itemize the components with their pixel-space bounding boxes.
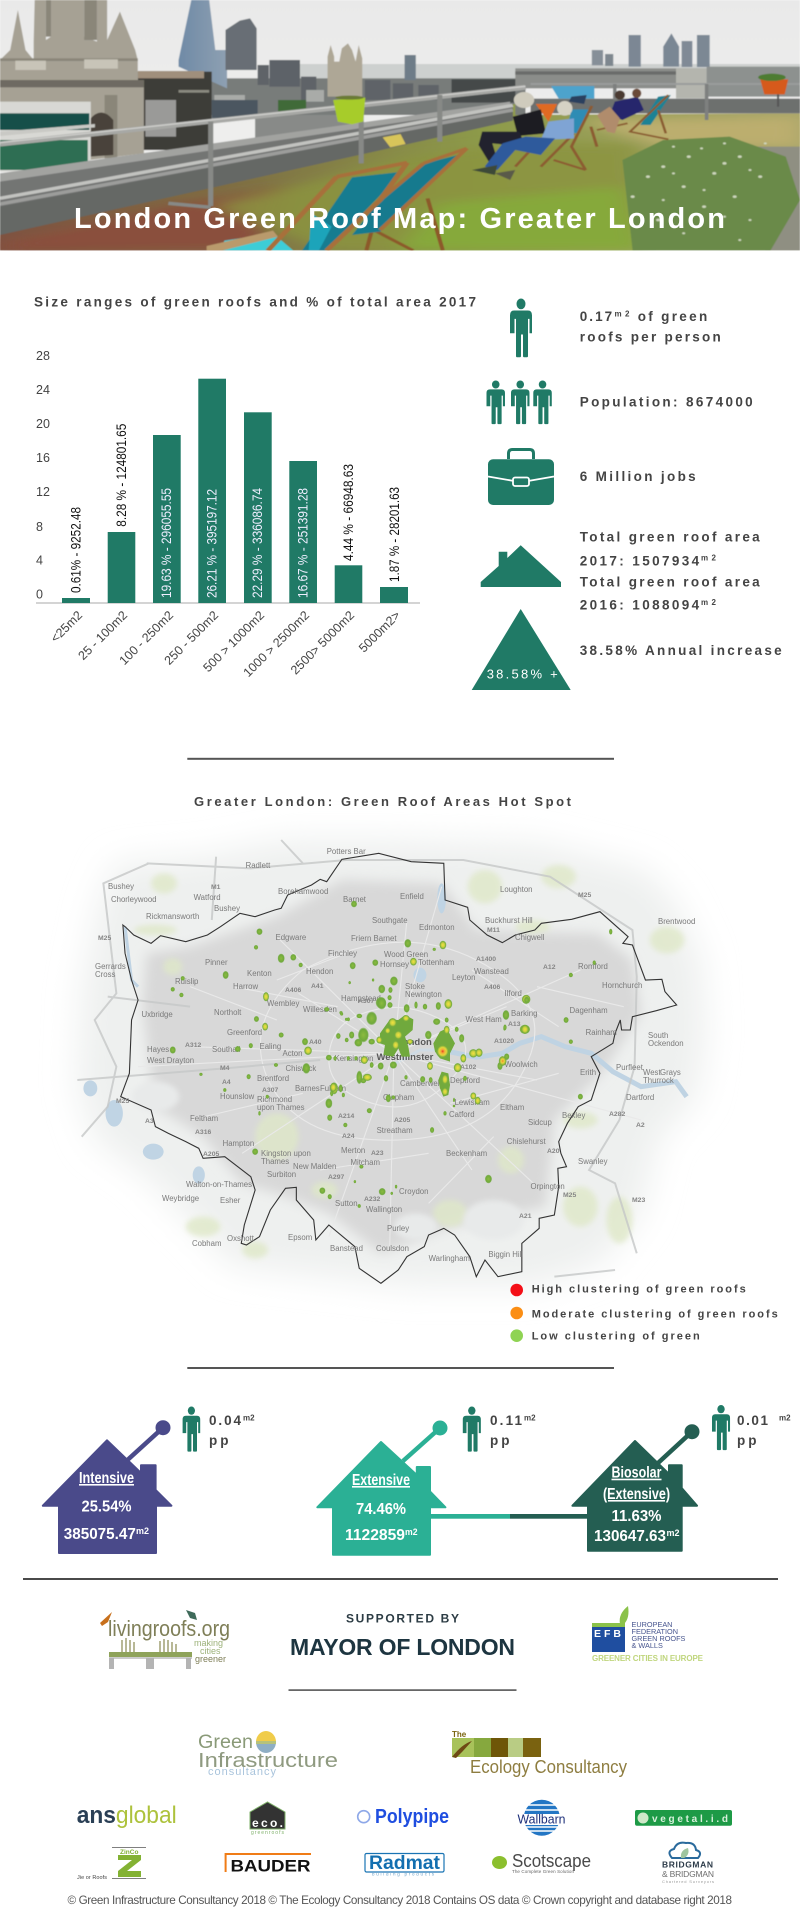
stat: per person: roofs per person — [580, 330, 721, 345]
logo: livingroofs.org: livingroofs.org — [108, 1616, 230, 1641]
map place labels: A307 — [358, 998, 374, 1005]
map place labels: Southall — [212, 1045, 240, 1054]
bar value labels: 16.67 % - 251391.28 — [296, 488, 310, 598]
logo: EFB: FEDERATION — [632, 1627, 678, 1636]
map place labels: Hornchurch — [602, 981, 642, 990]
map place labels: A307 — [262, 1087, 278, 1094]
map place labels: Wembley — [267, 999, 299, 1008]
map heading: Greater London: Green Roof Areas Hot Spot — [194, 794, 572, 809]
map place labels: A102 — [460, 1064, 476, 1071]
stats column — [472, 298, 782, 690]
map place labels: A2 — [636, 1122, 645, 1129]
map place labels: Rickmansworth — [146, 912, 199, 921]
y axis labels: 8 — [36, 520, 43, 534]
map place labels: Hampton — [223, 1139, 254, 1148]
stat: per person: 0.17 — [580, 309, 612, 324]
axis line — [36, 602, 420, 604]
map place labels: Swanley — [578, 1157, 608, 1166]
roof type: biosolar: Biosolar — [612, 1465, 662, 1482]
stat: total area: Total green roof area — [580, 530, 760, 545]
bar value labels: 22.29 % - 336086.74 — [250, 488, 265, 598]
map place labels: A214 — [338, 1113, 354, 1120]
y axis labels — [36, 349, 50, 602]
person stat: extensive — [463, 1406, 536, 1452]
map place labels: Bushey — [214, 904, 240, 913]
map place labels: Loughton — [500, 885, 533, 894]
map place labels: Brentford — [257, 1074, 289, 1083]
icon: house — [481, 545, 561, 587]
map place labels: Camberwell — [400, 1079, 441, 1088]
map place labels: West Drayton — [147, 1056, 194, 1065]
map place labels: M25 — [98, 935, 111, 942]
map place labels: Hampstead — [341, 994, 381, 1003]
map place labels: Chorleywood — [111, 895, 157, 904]
y axis labels: 28 — [36, 349, 50, 363]
logo: Wallbarn: Wallbarn — [518, 1812, 566, 1826]
roof type: intensive — [43, 1420, 171, 1553]
map place labels: Banstead — [330, 1244, 363, 1253]
map place labels: Uxbridge — [142, 1010, 173, 1019]
legend: High clustering of green roofs — [532, 1284, 746, 1296]
logo: EFB: & WALLS — [632, 1641, 663, 1650]
bars — [62, 379, 408, 603]
legend: Low clustering of green — [532, 1330, 700, 1342]
map place labels: Woolwich — [504, 1060, 538, 1069]
roof type: extensive: 1122859 — [345, 1527, 405, 1544]
map place labels: A406 — [484, 984, 500, 991]
category labels: 100 - 250m2 — [117, 608, 176, 668]
bar value labels: 4.44 % - 66948.63 — [341, 464, 356, 561]
hero photo: rooftop meadow and London skyline — [0, 0, 800, 253]
map place labels: Grays — [660, 1068, 681, 1077]
person stat: intensive: 0.04 — [209, 1413, 241, 1428]
map place labels: Chigwell — [515, 933, 545, 942]
map place labels: Barnet — [343, 895, 367, 904]
map place labels: Purfleet — [616, 1063, 644, 1072]
roof type: extensive — [317, 1420, 448, 1555]
map place labels: Willesden — [303, 1005, 337, 1014]
person stat: biosolar: m2 — [779, 1414, 791, 1422]
logo: Radmat: building products — [372, 1872, 435, 1876]
supported by Mayor of London: SUPPORTED BY — [346, 1612, 459, 1626]
map place labels: Erith — [580, 1068, 596, 1077]
roof type: biosolar: m2 — [666, 1528, 680, 1539]
map place labels: Eltham — [500, 1103, 524, 1112]
person stat: extensive: m2 — [524, 1414, 536, 1422]
category labels: 1000 > 2500m2 — [241, 608, 312, 680]
stat: per person: m2 — [614, 310, 630, 318]
map place labels: Lewisham — [455, 1098, 490, 1107]
connector bar — [431, 1514, 588, 1519]
map place labels: Harrow — [233, 982, 258, 991]
map place labels: Purley — [387, 1224, 409, 1233]
logo: eco greenroofs — [250, 1802, 285, 1836]
map place labels: Wallington — [366, 1205, 402, 1214]
logo: eco greenroofs: eco. — [252, 1816, 283, 1830]
map place labels: A1400 — [476, 956, 496, 963]
map place labels: Hendon — [306, 967, 333, 976]
map place labels: Clapham — [383, 1093, 414, 1102]
logo: EFB: GREENER CITIES IN EUROPE — [592, 1654, 704, 1663]
map place labels: Hornsey — [380, 960, 409, 969]
map place labels: Edgware — [276, 933, 306, 942]
map place labels: upon Thames — [257, 1103, 305, 1112]
logo: livingroofs.org — [100, 1610, 230, 1669]
logo: The Ecology Consultancy: Ecology Consultancy — [470, 1757, 627, 1777]
map place labels: Kensington — [334, 1054, 374, 1063]
map place labels: A40 — [309, 1039, 322, 1046]
roof type: extensive: m2 — [405, 1527, 418, 1538]
map place labels: Cobham — [192, 1239, 221, 1248]
logo: eco greenroofs: greenroofs — [251, 1830, 284, 1836]
logo: Scotscape — [492, 1851, 591, 1874]
logo: The Ecology Consultancy — [452, 1730, 627, 1777]
logo: Bridgman & Bridgman — [662, 1843, 714, 1884]
stat: per person — [580, 309, 721, 345]
logo: ZinCo: Jie or Roofs — [77, 1875, 107, 1881]
map place labels: M25 — [578, 892, 591, 899]
map place labels: South — [648, 1031, 668, 1040]
map place labels: Finchley — [328, 949, 357, 958]
map place labels: Chiswick — [286, 1064, 316, 1073]
map place labels: Bexley — [562, 1111, 586, 1120]
supported by Mayor of London: MAYOR OF LONDON — [290, 1634, 515, 1660]
map place labels: Sidcup — [528, 1118, 553, 1127]
bar value labels: 19.63 % - 296055.55 — [159, 488, 174, 598]
map place labels: Borehamwood — [278, 887, 328, 896]
map place labels: Tottenham — [418, 958, 454, 967]
category labels: 5000m2> — [356, 608, 403, 655]
map place labels: Enfield — [400, 892, 424, 901]
map place labels: Kenton — [247, 969, 272, 978]
bar value labels: 26.21 % - 395197.12 — [204, 489, 220, 598]
map place labels: Thurrock — [643, 1076, 674, 1085]
icon: three people — [486, 380, 552, 424]
y axis labels: 24 — [36, 383, 50, 397]
map place labels: A205 — [203, 1151, 219, 1158]
logo: EFB: GREEN ROOFS — [632, 1634, 686, 1643]
map place labels: Bushey — [108, 882, 134, 891]
logo: Bridgman & Bridgman: Chartered Surveyors — [662, 1879, 714, 1884]
stat: jobs: 6 Million jobs — [580, 469, 696, 484]
logo: EFB — [592, 1606, 704, 1663]
logo: BAUDER: BAUDER — [230, 1856, 310, 1876]
map place labels: A20 — [547, 1148, 560, 1155]
stat: population: Population: 8674000 — [580, 395, 753, 410]
supported by Mayor of London — [290, 1612, 515, 1660]
logo: vegetal i.d.: vegetal.i.d — [652, 1814, 728, 1825]
legend — [510, 1284, 778, 1342]
roof type: biosolar: 130647.63 — [594, 1528, 666, 1545]
map place labels: Wood Green — [384, 950, 428, 959]
logo: The Ecology Consultancy: The — [452, 1730, 467, 1739]
map place labels: Buckhurst Hill — [485, 916, 533, 925]
map place labels: Feltham — [190, 1114, 218, 1123]
map place labels: West Ham — [466, 1015, 502, 1024]
logo: Scotscape: The Complete Green Solution — [512, 1869, 574, 1874]
map place labels: Rainham — [586, 1028, 617, 1037]
category labels: 2500> 5000m2 — [288, 608, 357, 677]
logo: Wallbarn — [517, 1800, 567, 1836]
map place labels: Watford — [194, 893, 221, 902]
map place labels: Biggin Hill — [488, 1250, 523, 1259]
title: London Green Roof Map: Greater London — [74, 203, 725, 235]
map place labels: Mitcham — [350, 1158, 380, 1167]
roof type: biosolar — [572, 1424, 700, 1551]
roof type: intensive: 25.54% — [82, 1499, 132, 1516]
stat: total area: 2017: 1507934 — [580, 553, 700, 568]
bar value labels: 1.87 % - 28201.63 — [387, 487, 402, 582]
category labels: <25m2 — [48, 608, 85, 645]
roof type: biosolar: (Extensive) — [603, 1486, 670, 1503]
category labels: 500 > 1000m2 — [200, 608, 267, 675]
map place labels: Brentwood — [658, 917, 695, 926]
bar value labels: 0.61% - 9252.48 — [68, 507, 84, 593]
map place labels: Barnes — [295, 1084, 320, 1093]
map place labels: Merton — [341, 1146, 365, 1155]
stat: total area: m2 — [701, 598, 717, 607]
map place labels — [95, 847, 695, 1263]
rivers and reservoirs — [83, 883, 687, 1184]
map place labels: Sutton — [335, 1199, 358, 1208]
y axis labels: 12 — [36, 485, 50, 499]
map place labels: Stoke — [405, 982, 425, 991]
person stat: biosolar: pp — [737, 1433, 760, 1448]
category labels: 25 - 100m2 — [76, 608, 130, 663]
logo: Bridgman & Bridgman: BRIDGMAN — [662, 1860, 713, 1870]
map place labels: Kingston upon — [261, 1149, 311, 1158]
roof type: intensive: m2 — [136, 1526, 149, 1537]
map place labels: Orpington — [530, 1182, 565, 1191]
map: Greater London hot spots — [77, 840, 706, 1287]
map place labels: M4 — [220, 1065, 230, 1072]
person stat: intensive: pp — [209, 1433, 232, 1448]
map place labels: Romford — [578, 962, 608, 971]
map place labels: New Malden — [293, 1162, 336, 1171]
map place labels: Wanstead — [474, 967, 509, 976]
map place labels: Friern Barnet — [351, 934, 397, 943]
map place labels: West — [643, 1068, 661, 1077]
y axis labels: 0 — [36, 588, 43, 602]
map place labels: Weybridge — [162, 1194, 199, 1203]
map place labels: A316 — [195, 1129, 211, 1136]
map place labels: Potters Bar — [327, 847, 366, 856]
map place labels: Barking — [511, 1009, 537, 1018]
map place labels: M11 — [487, 927, 500, 934]
map place labels: Edmonton — [419, 923, 455, 932]
map place labels: Richmond — [257, 1095, 292, 1104]
icon: triangle increase — [472, 609, 571, 690]
map place labels: Southgate — [372, 916, 408, 925]
map place labels: Dartford — [626, 1093, 654, 1102]
chart heading: Size ranges of green roofs and % of total area 2017 — [34, 294, 476, 310]
map place labels: Dagenham — [570, 1006, 608, 1015]
map place labels: Fulham — [320, 1084, 346, 1093]
logo: vegetal i.d. — [635, 1810, 732, 1826]
map place labels: Northolt — [214, 1008, 242, 1017]
map place labels: M23 — [632, 1197, 645, 1204]
map place labels: Westminster — [376, 1052, 434, 1063]
map place labels: Epsom — [288, 1233, 312, 1242]
person stat: biosolar — [712, 1405, 791, 1450]
person stat: extensive: pp — [490, 1433, 512, 1448]
map place labels: Hounslow — [220, 1092, 255, 1101]
map place labels: Leyton — [452, 973, 475, 982]
map place labels: Cross — [95, 970, 115, 979]
logo: livingroofs.org: making — [194, 1638, 223, 1648]
map place labels: A24 — [342, 1133, 355, 1140]
map place labels: Warlingham — [429, 1254, 470, 1263]
roof type: extensive: Extensive — [352, 1472, 410, 1489]
y axis labels: 20 — [36, 417, 50, 431]
bar value labels — [68, 424, 402, 598]
logo: EFB: EFB — [594, 1628, 621, 1640]
icon: triangle increase: 38.58% + — [487, 667, 558, 682]
person stat: extensive: 0.11 — [490, 1413, 522, 1428]
map place labels: A297 — [328, 1174, 344, 1181]
map place labels: A4 — [222, 1079, 231, 1086]
map place labels: A21 — [519, 1213, 532, 1220]
legend: Moderate clustering of green roofs — [532, 1309, 778, 1321]
logo: Green Infrastructure Consultancy: consultancy — [208, 1766, 276, 1778]
icon: person — [510, 298, 532, 357]
map place labels: A1020 — [494, 1038, 514, 1045]
stat: total area: 2016: 1088094 — [580, 598, 700, 613]
map place labels: Deptford — [450, 1076, 480, 1085]
map place labels: Catford — [449, 1110, 475, 1119]
map place labels: Chislehurst — [507, 1137, 547, 1146]
front deck chairs — [207, 148, 467, 251]
logo: ZinCo: ZinCo — [120, 1849, 138, 1856]
logo: Green Infrastructure Consultancy: Green — [198, 1732, 253, 1753]
map place labels: Pinner — [205, 958, 228, 967]
map place labels: A282 — [609, 1111, 625, 1118]
map place labels: Thames — [261, 1157, 289, 1166]
bar value labels: 8.28 % - 124801.65 — [114, 424, 129, 527]
category labels — [48, 608, 403, 680]
map place labels: Esher — [220, 1196, 241, 1205]
y axis labels: 16 — [36, 451, 50, 465]
copyright line: © Green Infrastructure Consultancy 2018 © The Ecology Consultancy 2018 Contains OS data © Crown copyright and database right 2018 — [68, 1894, 732, 1907]
roof type: intensive: Intensive — [79, 1470, 134, 1487]
person stat: intensive — [183, 1406, 255, 1452]
stat: total area — [580, 530, 760, 613]
map place labels: A232 — [364, 1196, 380, 1203]
boundary of Greater London — [121, 853, 677, 1283]
map place labels: M25 — [116, 1098, 129, 1105]
roof type: extensive: 74.46% — [356, 1501, 406, 1518]
map place labels: Newington — [405, 990, 442, 999]
person stat: intensive: m2 — [243, 1414, 255, 1422]
map place labels: A205 — [394, 1117, 410, 1124]
map place labels: Acton — [282, 1049, 302, 1058]
map place labels: Ilford — [504, 989, 522, 998]
map place labels: Gerrards — [95, 962, 126, 971]
logo: Scotscape: Scotscape — [512, 1851, 591, 1871]
stat: annual increase: 38.58% Annual increase — [580, 643, 782, 658]
stat: total area: m2 — [701, 554, 717, 562]
logo: ZinCo — [77, 1848, 146, 1881]
map place labels: London — [397, 1037, 432, 1048]
map place labels: A12 — [543, 964, 556, 971]
map place labels: Walton-on-Thames — [186, 1180, 252, 1189]
category labels: 250 - 500m2 — [162, 608, 221, 668]
logo: livingroofs.org: greener — [195, 1654, 226, 1664]
person stat: biosolar: 0.01 — [737, 1413, 768, 1428]
icon: briefcase — [488, 450, 554, 505]
map place labels: A13 — [508, 1021, 521, 1028]
logo: Green Infrastructure Consultancy — [198, 1731, 338, 1778]
y axis labels: 4 — [36, 554, 43, 568]
map place labels: Streatham — [377, 1126, 413, 1135]
map place labels: Croydon — [399, 1187, 428, 1196]
logo: Polypipe: Polypipe — [375, 1806, 449, 1828]
bar chart: size ranges of green roofs — [34, 294, 476, 680]
map place labels: A41 — [311, 983, 324, 990]
roof type: biosolar: 11.63% — [612, 1508, 662, 1525]
map place labels: A3 — [145, 1118, 154, 1125]
logo: livingroofs.org: cities — [200, 1646, 221, 1656]
map place labels: M1 — [211, 884, 221, 891]
map place labels: Ruislip — [175, 977, 199, 986]
map place labels: Oxshott — [227, 1234, 255, 1243]
map place labels: Radlett — [246, 861, 271, 870]
logo: Radmat: Radmat — [369, 1853, 441, 1874]
stat: per person: of green — [638, 309, 707, 324]
map place labels: Coulsdon — [376, 1244, 409, 1253]
logo: ansglobal: ansglobal — [77, 1802, 177, 1829]
map place labels: Hayes — [147, 1045, 169, 1054]
map place labels: M25 — [563, 1192, 576, 1199]
logo: Bridgman & Bridgman: & BRIDGMAN — [662, 1869, 714, 1879]
map place labels: Surbiton — [267, 1170, 296, 1179]
logo: Green Infrastructure Consultancy: Infrastructure — [198, 1750, 338, 1772]
map place labels: A406 — [285, 987, 301, 994]
hot spots — [170, 901, 612, 1208]
map place labels: Ockendon — [648, 1039, 684, 1048]
map place labels: Beckenham — [446, 1149, 487, 1158]
map place labels: A312 — [185, 1042, 201, 1049]
map place labels: Greenford — [227, 1028, 262, 1037]
map place labels: Ealing — [260, 1042, 281, 1051]
stat: total area: Total green roof area — [580, 575, 760, 590]
map place labels: A23 — [371, 1150, 384, 1157]
logo: EFB: EUROPEAN — [632, 1620, 672, 1629]
roof type: intensive: 385075.47 — [64, 1526, 136, 1543]
